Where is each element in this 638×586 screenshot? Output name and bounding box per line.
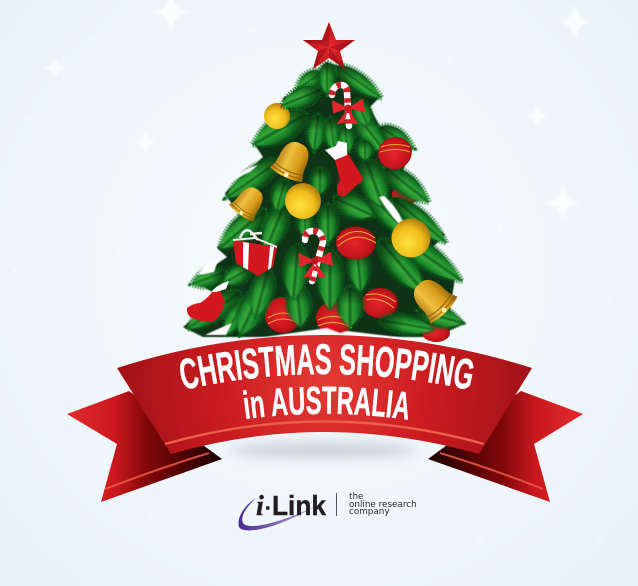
ornaments behind the branches (265, 186, 450, 342)
snow bank at the tree base (195, 328, 452, 349)
tagline: company (349, 507, 390, 517)
i-Link logo (239, 490, 326, 530)
branches (181, 59, 469, 341)
snow on branches (198, 165, 403, 335)
banner shadow (228, 442, 418, 458)
logo wordmark: · (265, 498, 272, 520)
logo divider (336, 493, 337, 516)
christmas tree (181, 22, 469, 342)
stockings (187, 141, 363, 322)
gold baubles (264, 81, 430, 257)
logo wordmark: Link (272, 490, 326, 521)
tagline: online research (349, 500, 417, 510)
tagline (349, 492, 417, 517)
tagline: the (349, 492, 363, 502)
main banner (117, 335, 532, 454)
banner title (180, 344, 474, 420)
candy canes (298, 85, 365, 281)
bells (228, 136, 460, 326)
logo wordmark: i (256, 491, 264, 522)
logo swoosh (239, 498, 316, 530)
ribbon left tail (67, 391, 222, 502)
red baubles (336, 131, 417, 260)
gift box (233, 230, 277, 276)
tree silhouette (183, 63, 465, 337)
banner title: CHRISTMAS SHOPPING (180, 344, 474, 389)
banner title: in AUSTRALIA (242, 386, 408, 420)
ribbon right tail (428, 391, 583, 502)
star (303, 22, 355, 69)
